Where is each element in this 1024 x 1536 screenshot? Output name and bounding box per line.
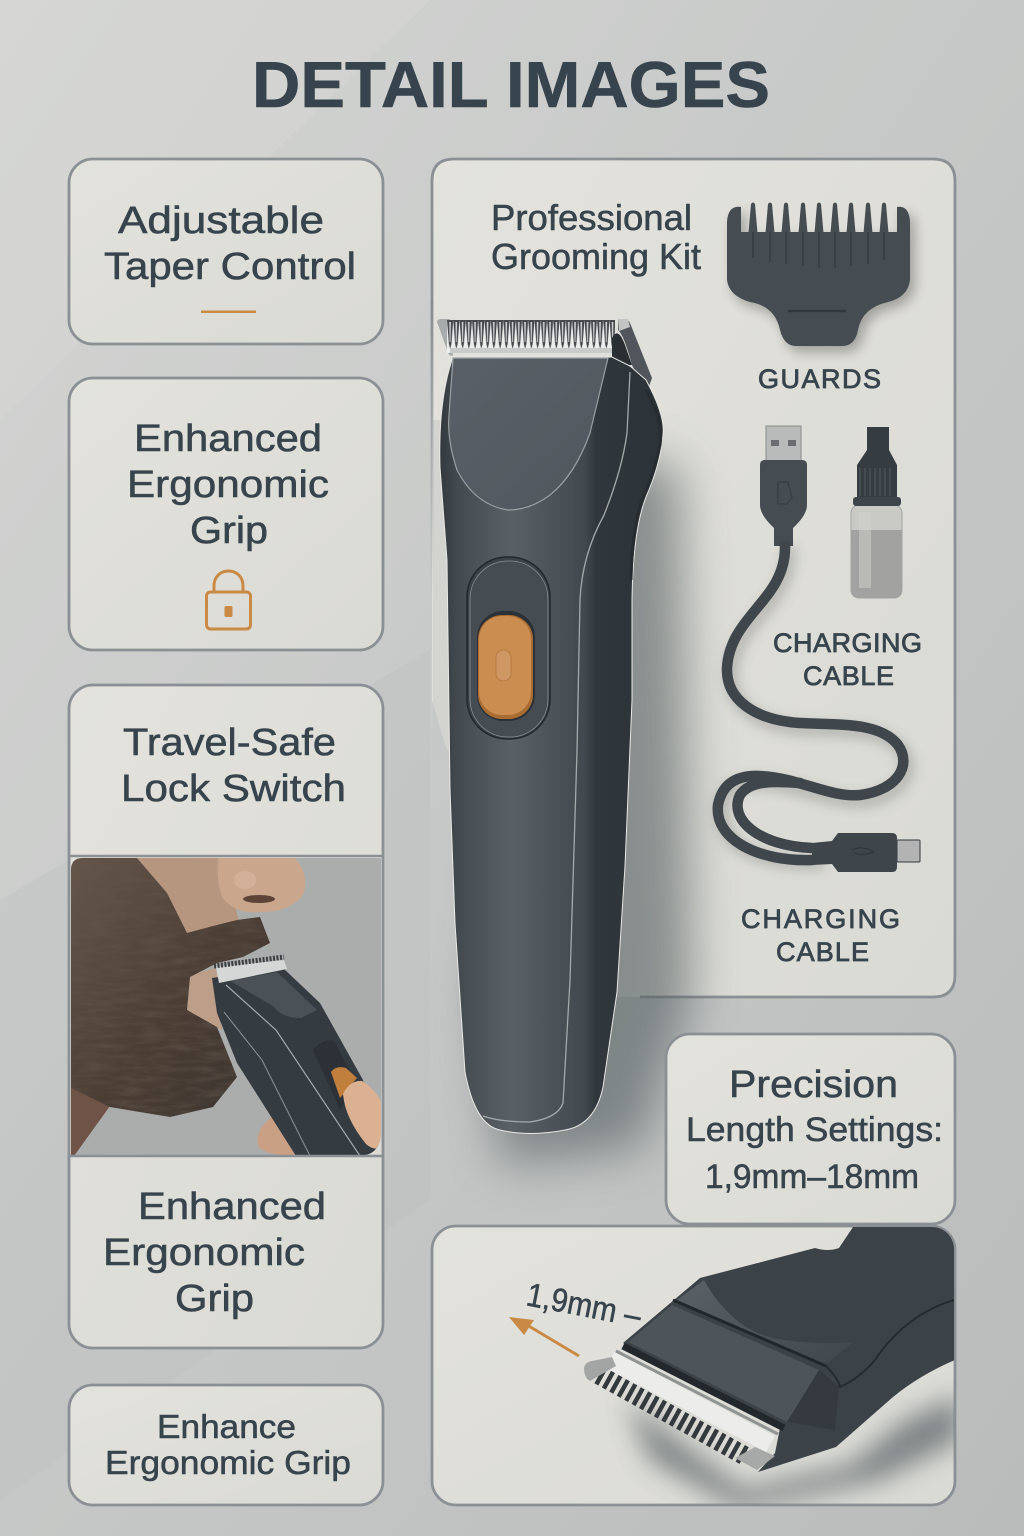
- heading: travel-safe lock switch: Lock Switch: [121, 768, 346, 810]
- heading: enhanced ergonomic grip lower: Grip: [175, 1278, 254, 1320]
- nose: [218, 858, 305, 912]
- orange switch: [477, 611, 535, 721]
- switch pocket: [467, 557, 550, 739]
- panel: travel-safe lock switch and usage photo: [69, 685, 383, 1348]
- icon: lock: [206, 571, 250, 629]
- label: guards: GUARDS: [758, 364, 881, 394]
- close-up trimmer body: [623, 1227, 955, 1472]
- heading: enhanced ergonomic grip: Ergonomic: [127, 464, 329, 506]
- label: charging cable upper: CABLE: [803, 661, 894, 691]
- icon: charging cable: [718, 546, 907, 863]
- icon: usb-c plug: [812, 833, 920, 872]
- trimmer body: [440, 357, 663, 1134]
- face panel: [449, 358, 608, 510]
- arrow: [509, 1317, 579, 1356]
- heading: enhance ergonomic grip: Ergonomic Grip: [105, 1444, 351, 1481]
- photo: trimming a beard: [71, 858, 381, 1156]
- thumb: [258, 1118, 296, 1155]
- icon: oil bottle: [851, 427, 902, 598]
- small trimmer: [212, 968, 381, 1156]
- accent line: [201, 310, 256, 313]
- heading: enhanced ergonomic grip lower: Ergonomic: [103, 1232, 305, 1274]
- label: charging cable lower: CABLE: [776, 937, 869, 967]
- heading: precision length settings: [686, 1064, 943, 1196]
- heading: adjustable taper control: Adjustable: [118, 200, 324, 242]
- trimmer shadow: [480, 440, 692, 1165]
- panel: enhance ergonomic grip: [69, 1385, 383, 1505]
- heading: enhance ergonomic grip: Enhance: [157, 1408, 296, 1445]
- label: charging cable upper: [773, 628, 922, 691]
- body seam: [483, 372, 630, 1122]
- back edge: [631, 390, 661, 580]
- heading: enhanced ergonomic grip lower: [103, 1186, 326, 1320]
- blade: [437, 319, 652, 395]
- heading: enhanced ergonomic grip: [127, 418, 329, 552]
- panel: adjustable taper control: [69, 159, 383, 344]
- icon: comb guard: [727, 202, 915, 352]
- heading: professional grooming kit: Professional: [491, 197, 692, 238]
- heading: professional grooming kit: [491, 197, 701, 277]
- title: DETAIL IMAGES: [252, 48, 770, 121]
- orange button: [331, 1067, 357, 1098]
- dimension label: 1,9mm –: [524, 1276, 645, 1334]
- heading: enhance ergonomic grip: [105, 1408, 351, 1481]
- heading: precision length settings: 1,9mm–18mm: [705, 1158, 919, 1196]
- label: charging cable lower: CHARGING: [741, 904, 900, 934]
- heading: travel-safe lock switch: Travel-Safe: [123, 722, 336, 764]
- finger: [343, 1081, 381, 1149]
- close-up shadow: [625, 1395, 960, 1510]
- panel: enhanced ergonomic grip with lock: [69, 378, 383, 650]
- panel: precision length settings: [666, 1034, 955, 1224]
- main trimmer: [437, 319, 692, 1165]
- icon: usb plug: [760, 426, 807, 546]
- panel: professional grooming kit: [432, 159, 955, 997]
- label: charging cable lower: [741, 904, 900, 967]
- heading: adjustable taper control: [104, 200, 356, 288]
- heading: travel-safe lock switch: [121, 722, 346, 810]
- heading: professional grooming kit: Grooming Kit: [491, 236, 701, 277]
- panel: blade close-up: [432, 1226, 960, 1510]
- heading: adjustable taper control: Taper Control: [104, 246, 356, 288]
- heading: precision length settings: Length Settings:: [686, 1111, 943, 1149]
- label: charging cable upper: CHARGING: [773, 628, 922, 658]
- heading: enhanced ergonomic grip lower: Enhanced: [138, 1186, 326, 1228]
- close-up blade: [584, 1351, 778, 1470]
- heading: enhanced ergonomic grip: Enhanced: [134, 418, 322, 460]
- heading: precision length settings: Precision: [729, 1064, 898, 1106]
- heading: enhanced ergonomic grip: Grip: [190, 510, 268, 552]
